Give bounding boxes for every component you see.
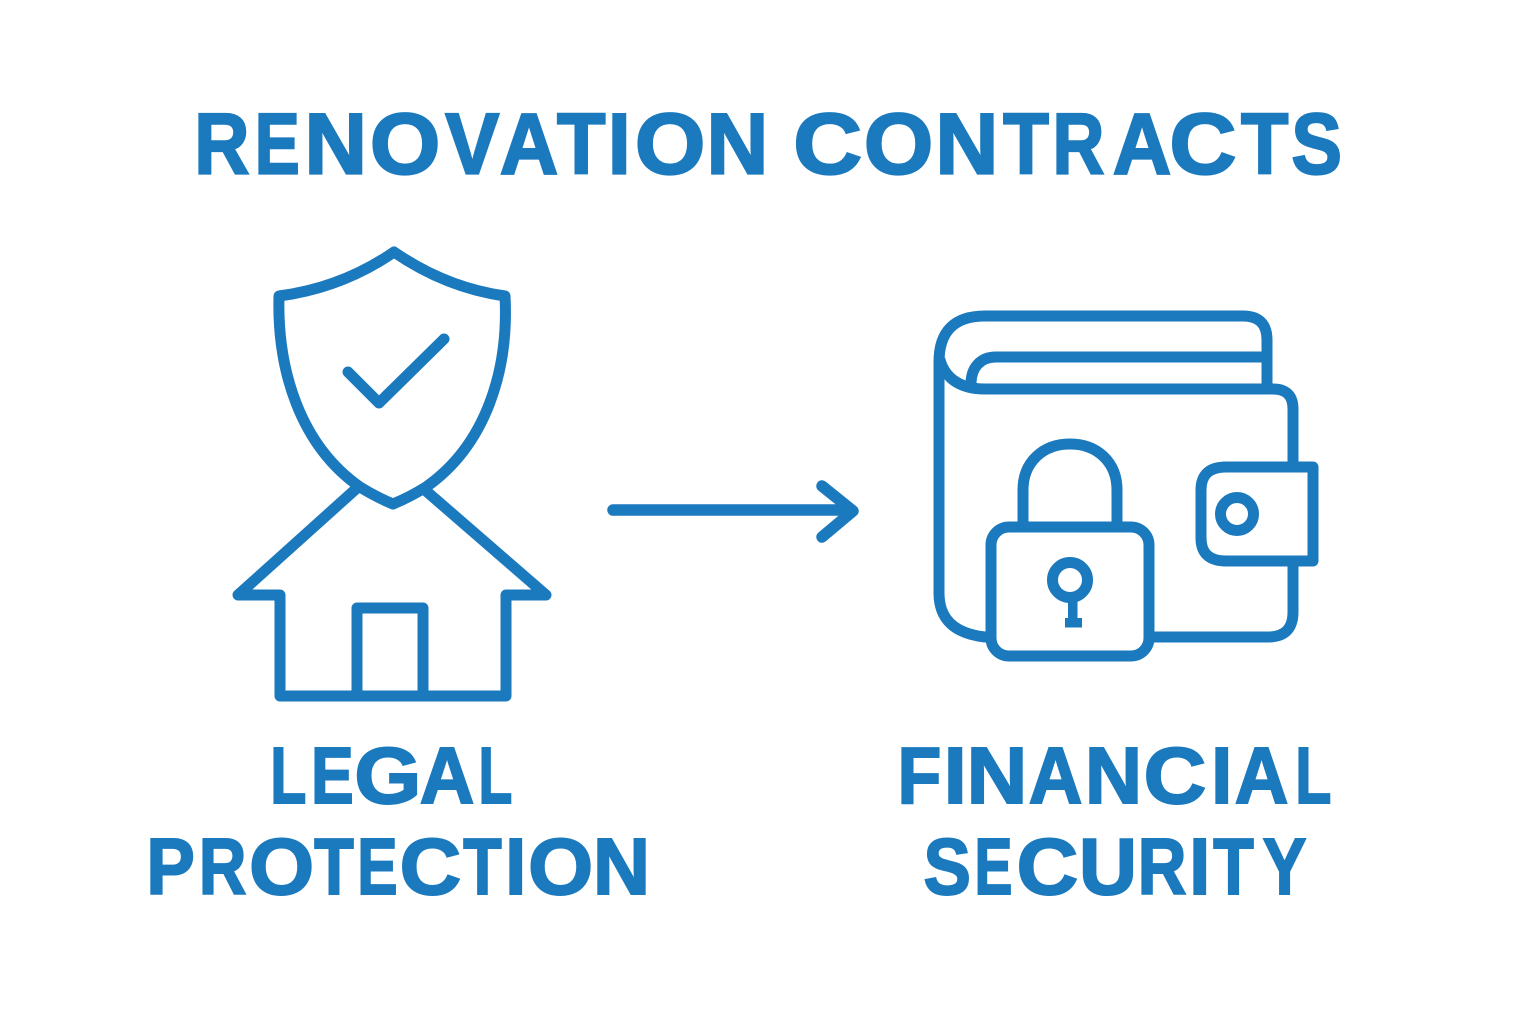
icon: padlock	[991, 444, 1149, 656]
label: financial security: A	[1235, 731, 1288, 820]
label: financial security: U	[1079, 822, 1137, 911]
label: legal protection: N	[593, 822, 650, 911]
label: financial security: L	[1295, 731, 1331, 820]
label: financial security: N	[967, 731, 1027, 820]
title: T	[1003, 96, 1049, 192]
title: N	[935, 96, 998, 192]
icon: wallet	[939, 316, 1313, 637]
label: financial security: T	[1213, 822, 1254, 911]
label: financial security: A	[1029, 731, 1082, 820]
title: C	[793, 96, 862, 192]
label: financial security: N	[1085, 731, 1142, 820]
label: financial security: S	[923, 822, 971, 911]
label: financial security: I	[944, 731, 967, 820]
label: financial security: F	[897, 731, 941, 820]
label: legal protection: L	[270, 731, 306, 820]
label: legal protection: O	[528, 822, 593, 911]
title: N	[707, 96, 768, 192]
title: C	[1169, 96, 1236, 192]
label: legal protection: E	[311, 731, 354, 820]
label: financial security: C	[1144, 731, 1206, 820]
icon: shield with checkmark	[279, 252, 505, 504]
label: financial security	[897, 731, 1331, 911]
label: legal protection: I	[505, 822, 526, 911]
label: legal protection: P	[146, 822, 195, 911]
title: A	[500, 96, 558, 192]
title: S	[1291, 96, 1342, 192]
label: legal protection: G	[354, 731, 421, 820]
arrow	[613, 486, 853, 537]
label: financial security: I	[1211, 731, 1232, 820]
label: financial security: R	[1138, 822, 1186, 911]
label: financial security: Y	[1263, 822, 1306, 911]
label: financial security: C	[1017, 822, 1078, 911]
label: legal protection: T	[463, 822, 502, 911]
icon: house	[238, 488, 546, 696]
title: R	[1052, 96, 1104, 192]
label: legal protection: L	[479, 731, 512, 820]
title: O	[864, 96, 933, 192]
label: legal protection: A	[420, 731, 474, 820]
title: R	[194, 96, 249, 192]
title: T	[557, 96, 606, 192]
title: N	[304, 96, 367, 192]
title: E	[255, 96, 300, 192]
label: legal protection: C	[400, 822, 461, 911]
label: financial security: E	[975, 822, 1012, 911]
label: legal protection: R	[199, 822, 246, 911]
title: I	[608, 96, 631, 192]
label: legal protection	[146, 731, 650, 911]
title: A	[1113, 96, 1171, 192]
label: legal protection: E	[357, 822, 398, 911]
title: O	[635, 96, 705, 192]
title: T	[1241, 96, 1288, 192]
title: O	[370, 96, 440, 192]
label: legal protection: O	[249, 822, 314, 911]
label: legal protection: T	[314, 822, 354, 911]
label: financial security: I	[1189, 822, 1210, 911]
title: V	[445, 96, 499, 192]
